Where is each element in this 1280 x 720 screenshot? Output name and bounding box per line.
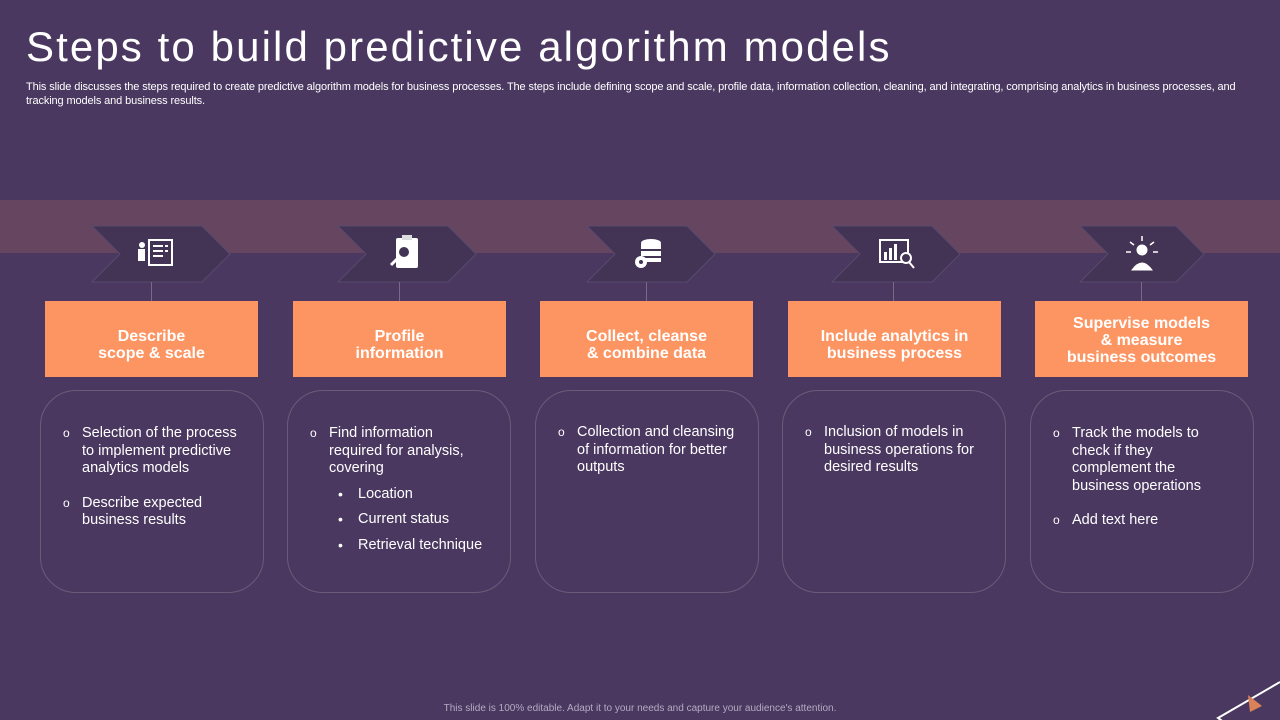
card 2: Retrieval technique	[358, 536, 482, 552]
card 3: outputs	[577, 459, 625, 475]
card 2: required for analysis,	[329, 442, 464, 458]
card 2: Location	[358, 486, 413, 502]
step 1 header: Describe	[118, 328, 185, 345]
card 1: business results	[82, 512, 186, 528]
card 1: Describe expected	[82, 494, 202, 510]
subtitle: This slide discusses the steps required to create predictive algorithm models for business processes. The steps include defining scope and scale, profile data, information collection, cleaning, and integrating, comprising analytics in business processes, and tracking models and business results.	[26, 81, 1235, 107]
card 4: Inclusion of models in	[824, 424, 963, 440]
icon: database gear	[635, 239, 661, 268]
card 4: desired results	[824, 459, 918, 475]
card 2	[287, 390, 511, 593]
card 5: check if they	[1072, 442, 1153, 458]
card 4: business operations for	[824, 442, 974, 458]
step 2 header	[293, 301, 506, 377]
card 5	[1030, 390, 1254, 593]
card 1: Selection of the process	[82, 425, 237, 441]
step 4 header: business process	[827, 345, 962, 362]
band	[0, 200, 1280, 253]
step 2 header: Profile	[375, 328, 424, 345]
card 5: complement the	[1072, 460, 1175, 476]
title: Steps to build predictive algorithm models	[26, 23, 892, 70]
step 4 header: Include analytics in	[821, 328, 968, 345]
step 3 header: Collect, cleanse	[586, 328, 707, 345]
step 3 header	[540, 301, 753, 377]
decorative corner arrow	[1216, 681, 1280, 720]
step 4 header	[788, 301, 1001, 377]
card 2: Current status	[358, 511, 449, 527]
card 2: covering	[329, 460, 384, 476]
icon: profile clipboard	[391, 235, 418, 268]
step 1 header	[45, 301, 258, 377]
chevrons with icons	[91, 226, 1204, 282]
icon: presenter	[138, 240, 172, 265]
card 3: of information for better	[577, 442, 727, 458]
icon: analytics board	[880, 240, 914, 268]
card 5: Track the models to	[1072, 425, 1199, 441]
step 5 header: Supervise models	[1073, 314, 1210, 332]
step 5 header	[1035, 301, 1248, 377]
card 5: business operations	[1072, 478, 1201, 494]
step 5 header: & measure	[1101, 332, 1182, 348]
card 2: Find information	[329, 425, 433, 441]
card 3: Collection and cleansing	[577, 424, 734, 440]
card 5: Add text here	[1072, 512, 1158, 528]
step 5 header: business outcomes	[1067, 348, 1216, 366]
card 1: to implement predictive	[82, 442, 231, 458]
card 1: analytics models	[82, 460, 189, 476]
step 1 header: scope & scale	[98, 345, 205, 362]
card 3	[535, 390, 759, 593]
footer: This slide is 100% editable. Adapt it to your needs and capture your audience's attention.	[444, 703, 836, 714]
step 3 header: & combine data	[587, 345, 706, 362]
step 2 header: information	[356, 345, 444, 362]
card 1	[40, 390, 264, 593]
icon: supervisor idea	[1126, 236, 1158, 270]
card 4	[782, 390, 1006, 593]
